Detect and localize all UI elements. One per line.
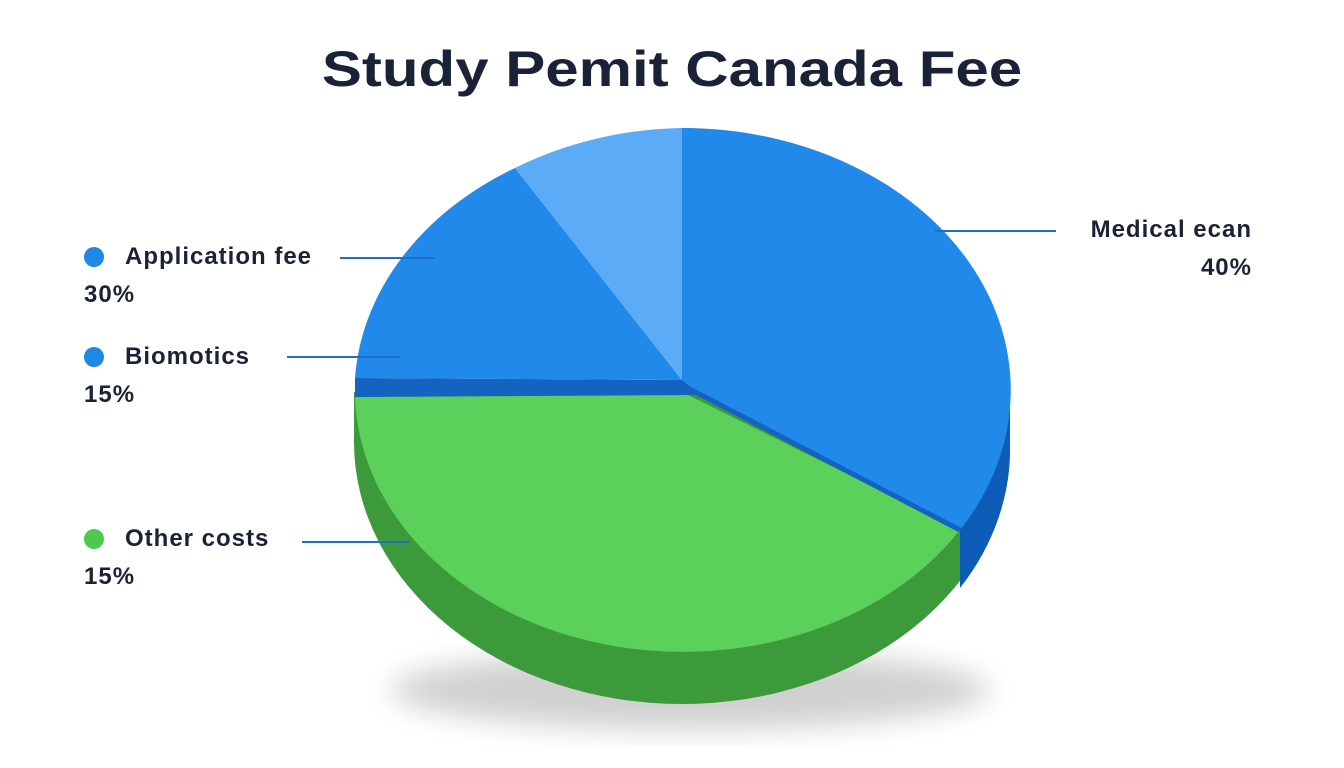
slice: other costs (355, 392, 960, 652)
legend: other costs (84, 525, 269, 590)
label: medical exam: 40% (1201, 254, 1252, 281)
legend: application fee: Application fee (125, 243, 312, 270)
leader lines (287, 231, 1056, 542)
legend: other costs: 15% (84, 563, 135, 590)
slice: dark band (355, 378, 700, 397)
slice: light blue (515, 128, 682, 380)
slice: application fee (355, 168, 682, 380)
title: Study Pemit Canada Fee (322, 41, 1022, 97)
legend: biomotics (84, 343, 250, 408)
legend: biomotics: Biomotics (125, 343, 250, 370)
label: medical exam: Medical ecan (1091, 216, 1252, 243)
label: medical exam (1091, 216, 1252, 281)
legend: other costs: Other costs (125, 525, 269, 552)
side: blue (960, 392, 1010, 588)
legend: application fee: 30% (84, 281, 135, 308)
slice: medical exam (682, 128, 1011, 530)
legend: biomotics: 15% (84, 381, 135, 408)
legend: application fee (84, 243, 312, 308)
side: green (354, 392, 1010, 704)
